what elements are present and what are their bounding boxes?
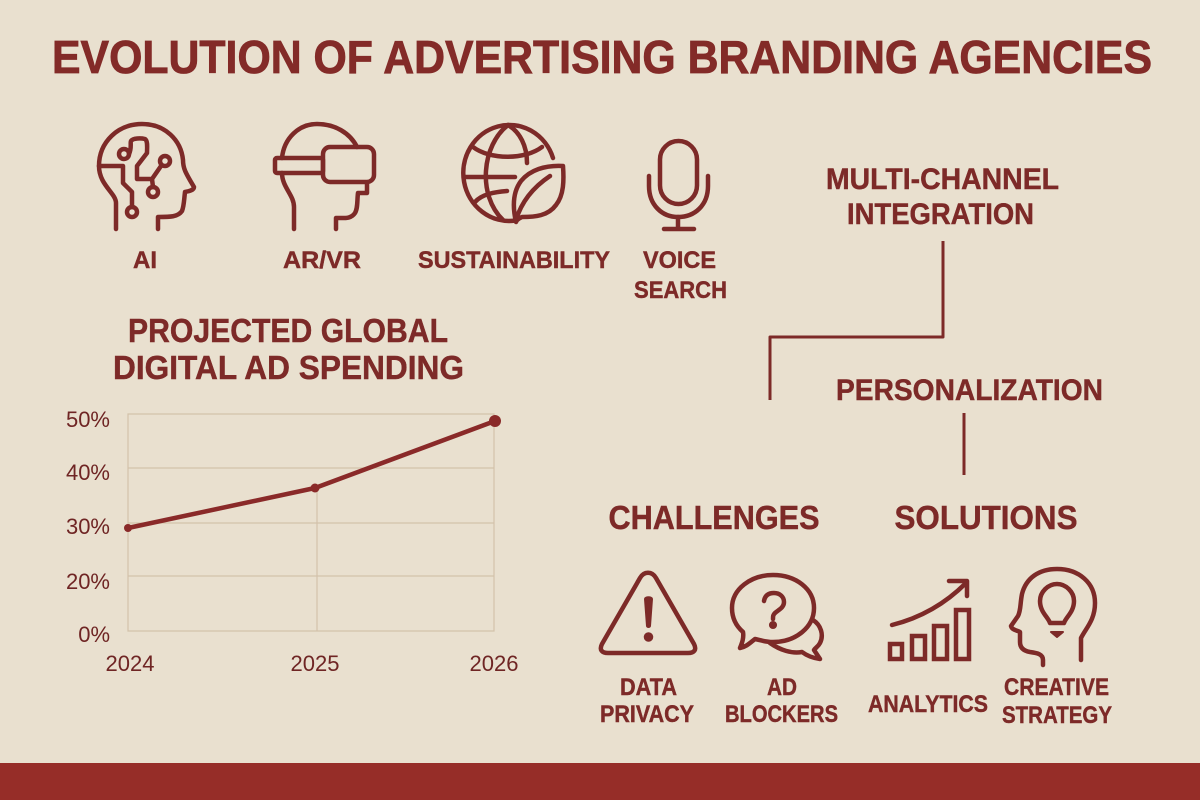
icon: microphone [649,141,708,229]
footer bar [0,763,1200,800]
label: ad blockers [725,674,838,728]
connector: personalization to solutions [962,413,966,475]
title: EVOLUTION OF ADVERTISING BRANDING AGENCIES [52,31,1152,83]
line chart: projected global digital ad spending: 30% [66,514,110,539]
label: voice search: VOICE [643,247,716,274]
label: creative strategy: STRATEGY [1002,702,1112,729]
label: voice search [634,247,727,304]
label: creative strategy [1002,674,1112,729]
line chart: projected global digital ad spending [66,407,518,676]
icon: analytics bars with arrow [890,581,969,659]
heading: challenges: CHALLENGES [608,499,820,536]
label: voice search: SEARCH [634,277,727,304]
line chart: projected global digital ad spending: 50% [66,407,110,432]
label: analytics: ANALYTICS [868,691,988,718]
heading: multi-channel integration [826,163,1059,231]
line chart: projected global digital ad spending: 2025 [291,651,339,676]
line chart: projected global digital ad spending: 40% [66,460,110,485]
icon: AR/VR headset head [275,124,374,229]
line chart: projected global digital ad spending: 2024 [106,651,154,676]
heading: chart title: PROJECTED GLOBAL [128,312,448,349]
heading: solutions: SOLUTIONS [894,499,1078,536]
icon: warning triangle [601,573,695,653]
label: data privacy: DATA [620,674,677,701]
heading: multi-channel integration: INTEGRATION [847,198,1034,231]
label: ad blockers: AD [767,674,797,701]
heading: chart title [113,312,464,386]
icon: speech bubbles with question mark [732,575,822,659]
label: creative strategy: CREATIVE [1004,674,1109,701]
label: data privacy [600,674,694,728]
icon: head with lightbulb [1011,569,1095,665]
line chart: projected global digital ad spending: 0% [78,622,110,647]
label: sustainability: SUSTAINABILITY [418,247,610,274]
line chart: projected global digital ad spending: 20% [66,569,110,594]
label: data privacy: PRIVACY [600,701,694,728]
label: AI: AI [133,247,157,274]
heading: personalization: PERSONALIZATION [836,374,1103,407]
heading: multi-channel integration: MULTI-CHANNEL [826,163,1059,196]
line chart: projected global digital ad spending: 2026 [470,651,518,676]
icon: globe with leaf [463,125,563,222]
connector: integration to challenges [770,241,943,400]
heading: chart title: DIGITAL AD SPENDING [113,349,464,386]
label: ad blockers: BLOCKERS [725,701,838,728]
label: AR/VR: AR/VR [283,247,361,274]
icon: AI head with circuit [99,124,194,229]
